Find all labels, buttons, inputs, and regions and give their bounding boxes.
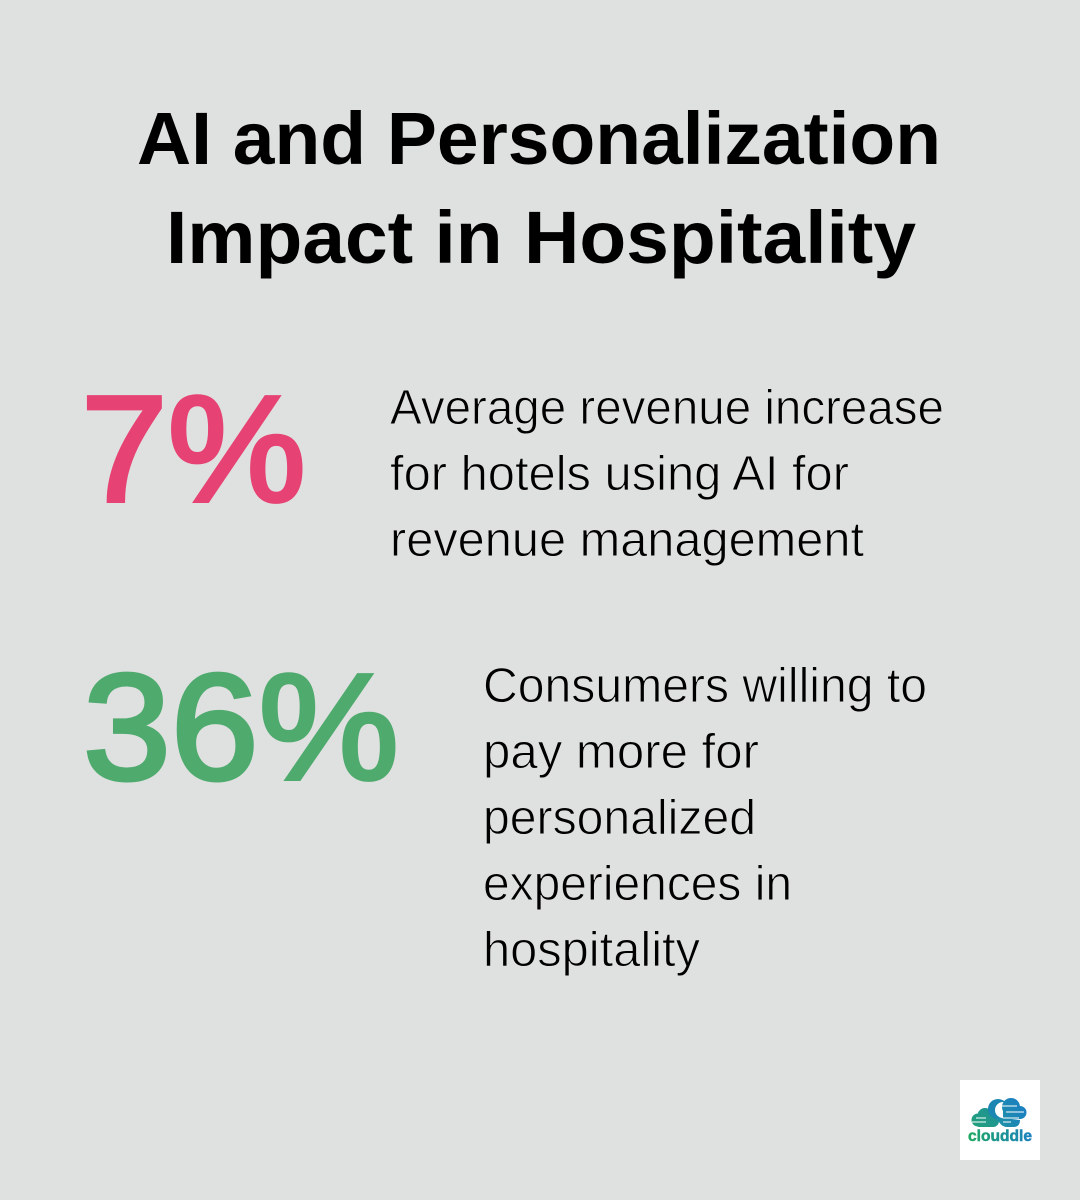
stat description: revenue: for hotels using AI for xyxy=(390,447,849,501)
stat value: 7%: 7% xyxy=(81,364,306,533)
stat description: revenue: Average revenue increase xyxy=(390,381,944,435)
icon: clouds xyxy=(972,1098,1026,1127)
stat description: consumers: pay more for xyxy=(483,725,759,779)
stat description: consumers: experiences in xyxy=(483,857,792,911)
title: AI and Personalization xyxy=(137,97,941,180)
stat description: consumers: Consumers willing to xyxy=(483,659,927,713)
stat description: consumers xyxy=(483,659,927,977)
logo wordmark: clouddle xyxy=(968,1128,1032,1145)
stat description: consumers: hospitality xyxy=(483,923,700,977)
stat value: 36%: 36% xyxy=(83,642,399,811)
stat description: consumers: personalized xyxy=(483,791,756,845)
stat: 36% willing to pay more xyxy=(83,642,927,977)
title xyxy=(137,97,941,279)
stat description: revenue xyxy=(390,381,944,567)
stat description: revenue: revenue management xyxy=(390,513,864,567)
logo: clouddle xyxy=(960,1080,1040,1160)
title: Impact in Hospitality xyxy=(166,196,916,279)
stat: 7% revenue increase xyxy=(81,364,944,567)
